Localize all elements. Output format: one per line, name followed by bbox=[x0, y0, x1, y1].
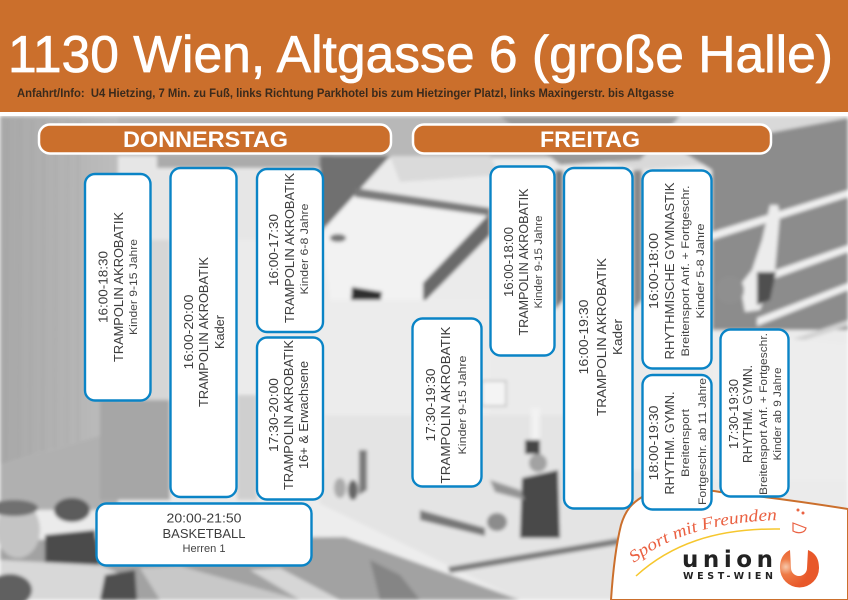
card: Fr 16:00-18:00: 16:00-18:00 bbox=[502, 227, 516, 297]
card: Do 16:00-18:30 bbox=[85, 174, 150, 400]
card: Do 16:00-20:00: 16:00-20:00 bbox=[182, 294, 196, 370]
card: Do 16:00-17:30 bbox=[257, 169, 323, 332]
card: Do 17:30-20:00: TRAMPOLIN AKROBATIK bbox=[282, 339, 296, 490]
card: Fr 17:30-19:30 rhythmic gymnastics: 17:30-19:30 bbox=[727, 379, 741, 449]
icon: union U bbox=[780, 550, 819, 588]
card: Do 16:00-17:30: 16:00-17:30 bbox=[267, 214, 281, 286]
gymnast bbox=[740, 205, 780, 312]
basketball board bbox=[482, 381, 506, 406]
card: Fr 18:00-19:30 rhythmic gymnastics: 18:00-19:30 bbox=[647, 405, 661, 480]
day pill: Donnerstag: DONNERSTAG bbox=[123, 127, 288, 152]
card: Fr 16:00-18:00 rhythmic gymnastics bbox=[642, 170, 712, 368]
card: Do 16:00-18:30: Kinder 9-15 Jahre bbox=[128, 239, 140, 335]
card: Do 20:00-21:50 basketball: BASKETBALL bbox=[162, 527, 246, 541]
card: Fr 16:00-19:30: TRAMPOLIN AKROBATIK bbox=[595, 257, 609, 416]
card: Fr 17:30-19:30 rhythmic gymnastics: RHYTHM. GYMN. bbox=[741, 365, 755, 463]
card: Do 16:00-18:30: 16:00-18:30 bbox=[96, 251, 110, 323]
card: Do 16:00-17:30: TRAMPOLIN AKROBATIK bbox=[283, 172, 297, 323]
white strip under header bbox=[0, 112, 848, 116]
card: Fr 18:00-19:30 rhythmic gymnastics: Breitensport bbox=[680, 409, 692, 477]
card: Fr 16:00-18:00 rhythmic gymnastics: 16:00-18:00 bbox=[647, 233, 661, 309]
floor bbox=[320, 470, 712, 600]
speaker bbox=[351, 287, 382, 304]
card: Do 17:30-20:00 bbox=[257, 338, 323, 500]
card: Fr 16:00-18:00: Kinder 9-15 Jahre bbox=[533, 216, 545, 308]
people left bbox=[45, 530, 100, 570]
day pill: Freitag bbox=[413, 124, 771, 154]
card: Fr 16:00-19:30: 16:00-19:30 bbox=[577, 299, 591, 374]
directions text: Anfahrt/Info: U4 Hietzing, 7 Min. zu Fuß, links Richtung Parkhotel bis zum Hietzinger Platzl, links Maxingerstr. bis Altgasse bbox=[17, 88, 674, 100]
card: Do 16:00-20:00: Kader bbox=[213, 315, 227, 349]
card: Do 16:00-17:30: Kinder 6-8 Jahre bbox=[299, 204, 311, 294]
card: Do 20:00-21:50 basketball: Herren 1 bbox=[182, 543, 226, 555]
card: Do 17:30-20:00: 16+ & Erwachsene bbox=[297, 361, 311, 469]
card: Fr 16:00-18:00 rhythmic gymnastics: Breitensport Anf. + Fortgeschr. bbox=[680, 185, 692, 357]
card: Fr 17:30-19:30 rhythmic gymnastics: Breitensport Anf. + Fortgeschr. bbox=[758, 333, 770, 495]
card: Fr 17:30-19:30: 17:30-19:30 bbox=[424, 368, 438, 442]
card: Fr 18:00-19:30 rhythmic gymnastics: RHYTHM. GYMN. bbox=[663, 391, 677, 495]
card: Fr 16:00-18:00 rhythmic gymnastics: RHYTHMISCHE GYMNASTIK bbox=[663, 182, 677, 360]
card: Fr 17:30-19:30 bbox=[412, 318, 482, 486]
card: Do 17:30-20:00: 17:30-20:00 bbox=[267, 378, 281, 452]
card: Fr 16:00-18:00 rhythmic gymnastics: Kinder 5-8 Jahre bbox=[695, 224, 707, 318]
header band bbox=[0, 0, 848, 112]
top ceiling bbox=[0, 116, 848, 158]
card: Do 16:00-20:00 bbox=[170, 168, 236, 497]
day pill: Donnerstag bbox=[39, 124, 391, 154]
card: Do 20:00-21:50 basketball: 20:00-21:50 bbox=[166, 512, 242, 526]
day pill: Freitag: FREITAG bbox=[540, 127, 640, 152]
card: Fr 17:30-19:30 rhythmic gymnastics bbox=[720, 330, 788, 496]
title: 1130 Wien, Altgasse 6 (große Halle) bbox=[8, 26, 833, 84]
hall wall bbox=[320, 300, 490, 470]
slogan bbox=[634, 520, 790, 563]
card: Fr 16:00-18:00 bbox=[490, 166, 554, 356]
card: Fr 16:00-18:00: TRAMPOLIN AKROBATIK bbox=[517, 188, 531, 336]
card: Fr 18:00-19:30 rhythmic gymnastics bbox=[642, 375, 712, 510]
card: Fr 16:00-19:30 bbox=[564, 168, 632, 508]
card: Fr 18:00-19:30 rhythmic gymnastics: Fortgeschr. ab 11 Jahre bbox=[697, 378, 709, 505]
logo panel bbox=[610, 490, 848, 600]
card: Fr 16:00-19:30: Kader bbox=[611, 319, 625, 355]
card: Fr 17:30-19:30: Kinder 9-15 Jahre bbox=[457, 356, 469, 454]
people on floor bbox=[359, 450, 367, 495]
card: Fr 17:30-19:30 rhythmic gymnastics: Kinder ab 9 Jahre bbox=[772, 368, 784, 460]
ceiling panels and beams bbox=[322, 190, 490, 300]
left wall bbox=[0, 116, 118, 465]
card: Do 20:00-21:50 basketball bbox=[96, 504, 312, 566]
card: Do 16:00-18:30: TRAMPOLIN AKROBATIK bbox=[112, 211, 126, 362]
wordmark west-wien: WEST-WIEN bbox=[683, 571, 773, 582]
logo panel: Sport mit Freunden bbox=[630, 509, 776, 562]
card: Fr 17:30-19:30: TRAMPOLIN AKROBATIK bbox=[439, 326, 453, 484]
icon: smiley bbox=[793, 509, 806, 533]
wordmark union: union bbox=[682, 547, 773, 573]
blue crash mat bbox=[0, 537, 520, 600]
slogan curve bbox=[636, 529, 780, 576]
card: Do 16:00-20:00: TRAMPOLIN AKROBATIK bbox=[197, 256, 211, 407]
